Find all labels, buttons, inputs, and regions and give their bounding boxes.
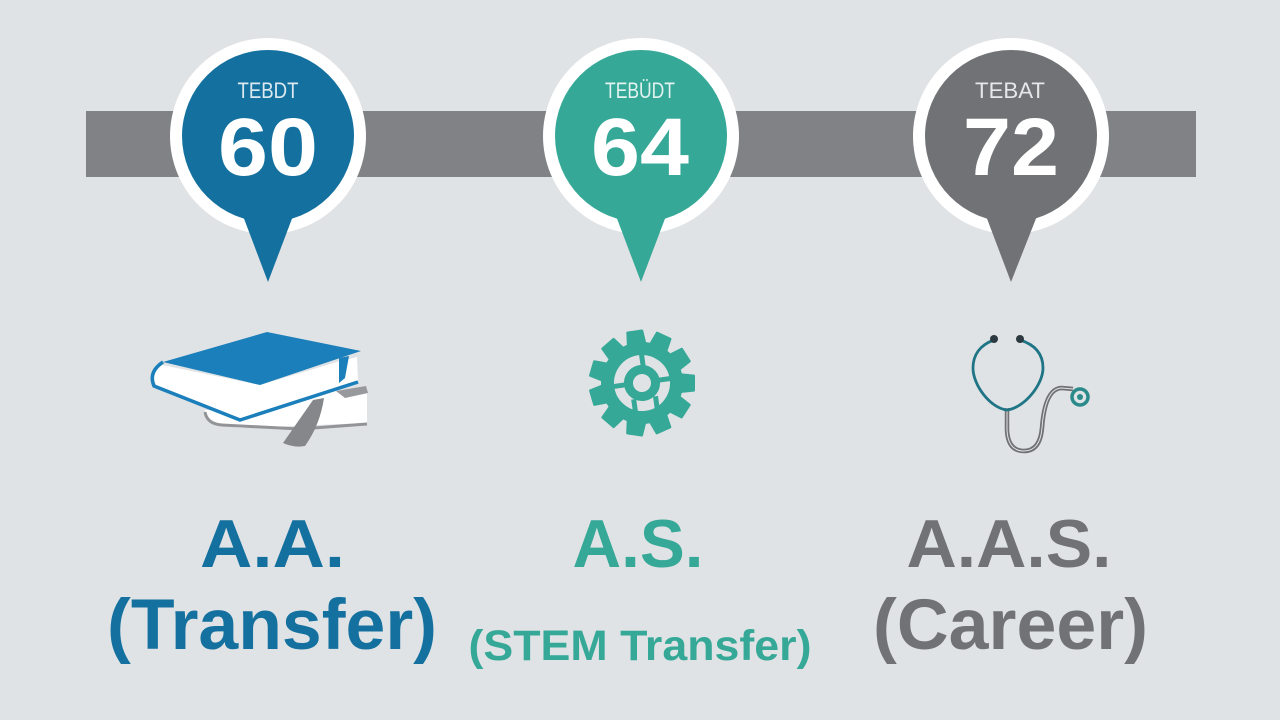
label: A.A. (Transfer)	[107, 506, 437, 665]
lower book pages	[205, 388, 367, 428]
pin: 60 credits: TEBDT	[238, 78, 298, 103]
label: A.A.S. (Career): (Career)	[873, 586, 1148, 665]
label: A.S. (STEM Transfer)	[468, 506, 812, 670]
pin: 72 credits	[913, 38, 1109, 282]
label: A.A.S. (Career): A.A.S.	[906, 506, 1112, 582]
icon: books	[152, 332, 368, 447]
horizontal timeline bar	[86, 111, 1196, 177]
pin: 64 credits: TEBÜDT	[605, 78, 675, 103]
label: A.A.S. (Career)	[873, 506, 1148, 665]
pin: 72 credits: TEBAT	[975, 78, 1045, 103]
pin: 60 credits	[170, 38, 366, 282]
pin: 64 credits	[543, 38, 739, 282]
pin: 64 credits: 64	[591, 102, 689, 193]
label: A.S. (STEM Transfer): A.S.	[572, 506, 704, 582]
label: A.A. (Transfer): (Transfer)	[107, 586, 437, 665]
upper book pages	[154, 357, 358, 419]
icon: stethoscope	[973, 335, 1088, 451]
label: A.A. (Transfer): A.A.	[200, 506, 345, 582]
bookmark	[283, 398, 324, 447]
pin: 60 credits: 60	[218, 102, 318, 193]
pin: 72 credits: 72	[963, 102, 1059, 193]
label: A.S. (STEM Transfer): (STEM Transfer)	[468, 622, 812, 670]
icon: gear	[581, 323, 703, 444]
